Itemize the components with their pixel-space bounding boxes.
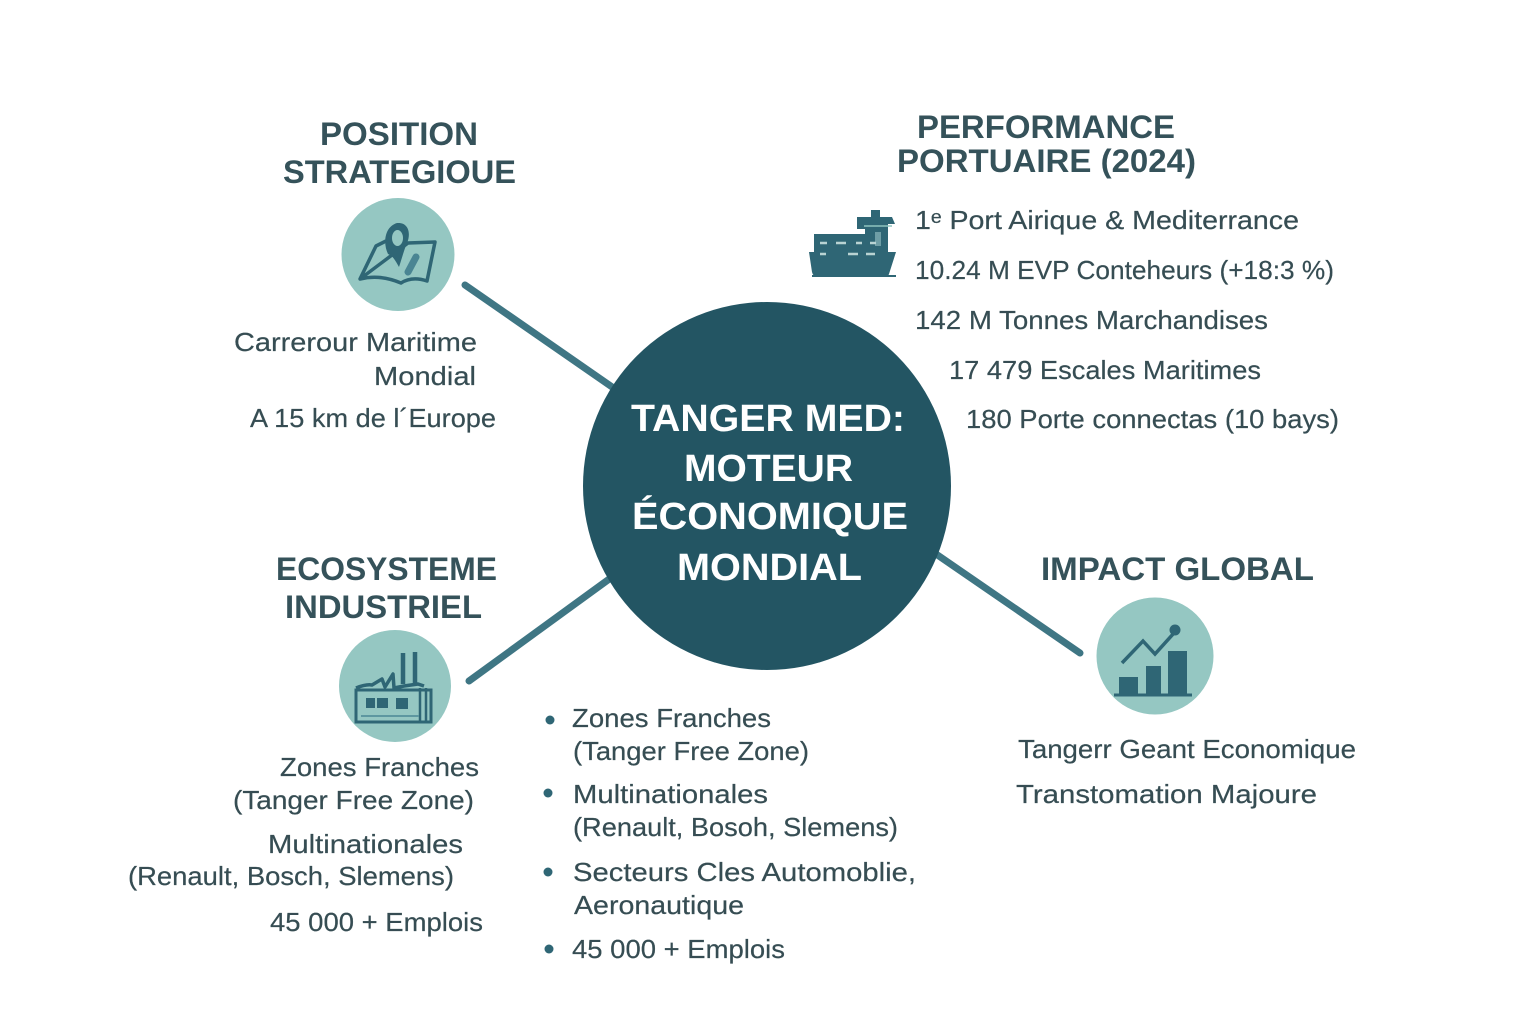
list: port statistics: 142 M Tonnes Marchandises [915,305,1268,335]
text: ecosysteme industriel: (Tanger Free Zone) [233,785,474,815]
panel: ecosysteme industriel [128,551,497,937]
icon: container ship [809,210,896,277]
bullet: multinationales: (Renault, Bosoh, Slemens) [573,812,898,842]
text: ecosysteme industriel: Zones Franches [280,752,479,782]
bullet: secteurs cles: Aeronautique [574,890,744,920]
icon: growth chart [1096,598,1214,714]
bullet: multinationales: Multinationales [573,779,768,809]
text: impact global [1016,734,1356,809]
panel: performance portuaire [809,109,1339,434]
bullet: zones franches: Zones Franches [572,703,771,733]
heading: position strategique: STRATEGIOUE [283,154,516,190]
text: ecosysteme industriel: 45 000 + Emplois [270,907,483,937]
list: port statistics [915,205,1339,434]
bullet: emplois: 45 000 + Emplois [572,934,785,964]
text: ecosysteme industriel [128,752,483,937]
connector: impact global [936,554,1080,653]
heading: position strategique: POSITION [320,116,478,152]
heading: performance portuaire [897,109,1196,179]
heading: ecosysteme industriel: ECOSYSTEME [276,551,497,587]
heading: ecosysteme industriel: INDUSTRIEL [285,589,482,625]
central circle title: MOTEUR [684,448,853,490]
central circle title: ÉCONOMIQUE [632,494,908,538]
text: impact global: Tangerr Geant Economique [1018,734,1356,764]
bullet: zones franches: (Tanger Free Zone) [573,736,809,766]
list: port statistics: 17 479 Escales Maritimes [949,355,1261,385]
heading: position strategique [283,116,516,190]
text: position strategique: Carrerour Maritime [234,327,477,357]
connector: ecosysteme industriel [469,577,612,681]
heading: ecosysteme industriel [276,551,497,625]
bullet: zones franches [546,703,809,766]
text: position strategique: A 15 km de l´Europe [250,403,496,433]
connector: position strategique [465,285,615,389]
heading: performance portuaire: PORTUAIRE (2024) [897,143,1196,179]
panel: position strategique [234,116,516,433]
text: position strategique: Mondial [374,361,476,391]
list: port statistics: 1ᵉ Port Airique & Mediterrance [915,205,1299,235]
heading: performance portuaire: PERFORMANCE [917,109,1175,145]
text: ecosysteme industriel: (Renault, Bosch, Slemens) [128,861,454,891]
icon: factory [339,630,451,742]
text: ecosysteme industriel: Multinationales [268,829,463,859]
bullet: multinationales [544,779,898,842]
list: port statistics: 10.24 M EVP Conteheurs (+18:3 %) [915,255,1334,285]
bullet: secteurs cles [544,857,916,920]
heading: impact global: IMPACT GLOBAL [1041,551,1314,587]
text: position strategique [234,327,496,433]
central circle title: MONDIAL [677,547,862,589]
central circle title: TANGER MED: [631,398,905,440]
list: port statistics: 180 Porte connectas (10 bays) [966,404,1339,434]
panel: impact global [1016,551,1356,809]
panel: bullet list [544,703,916,964]
central circle title [583,302,951,670]
text: impact global: Transtomation Majoure [1016,779,1317,809]
icon: map with pin [342,198,454,311]
bullet: secteurs cles: Secteurs Cles Automoblie, [573,857,916,887]
